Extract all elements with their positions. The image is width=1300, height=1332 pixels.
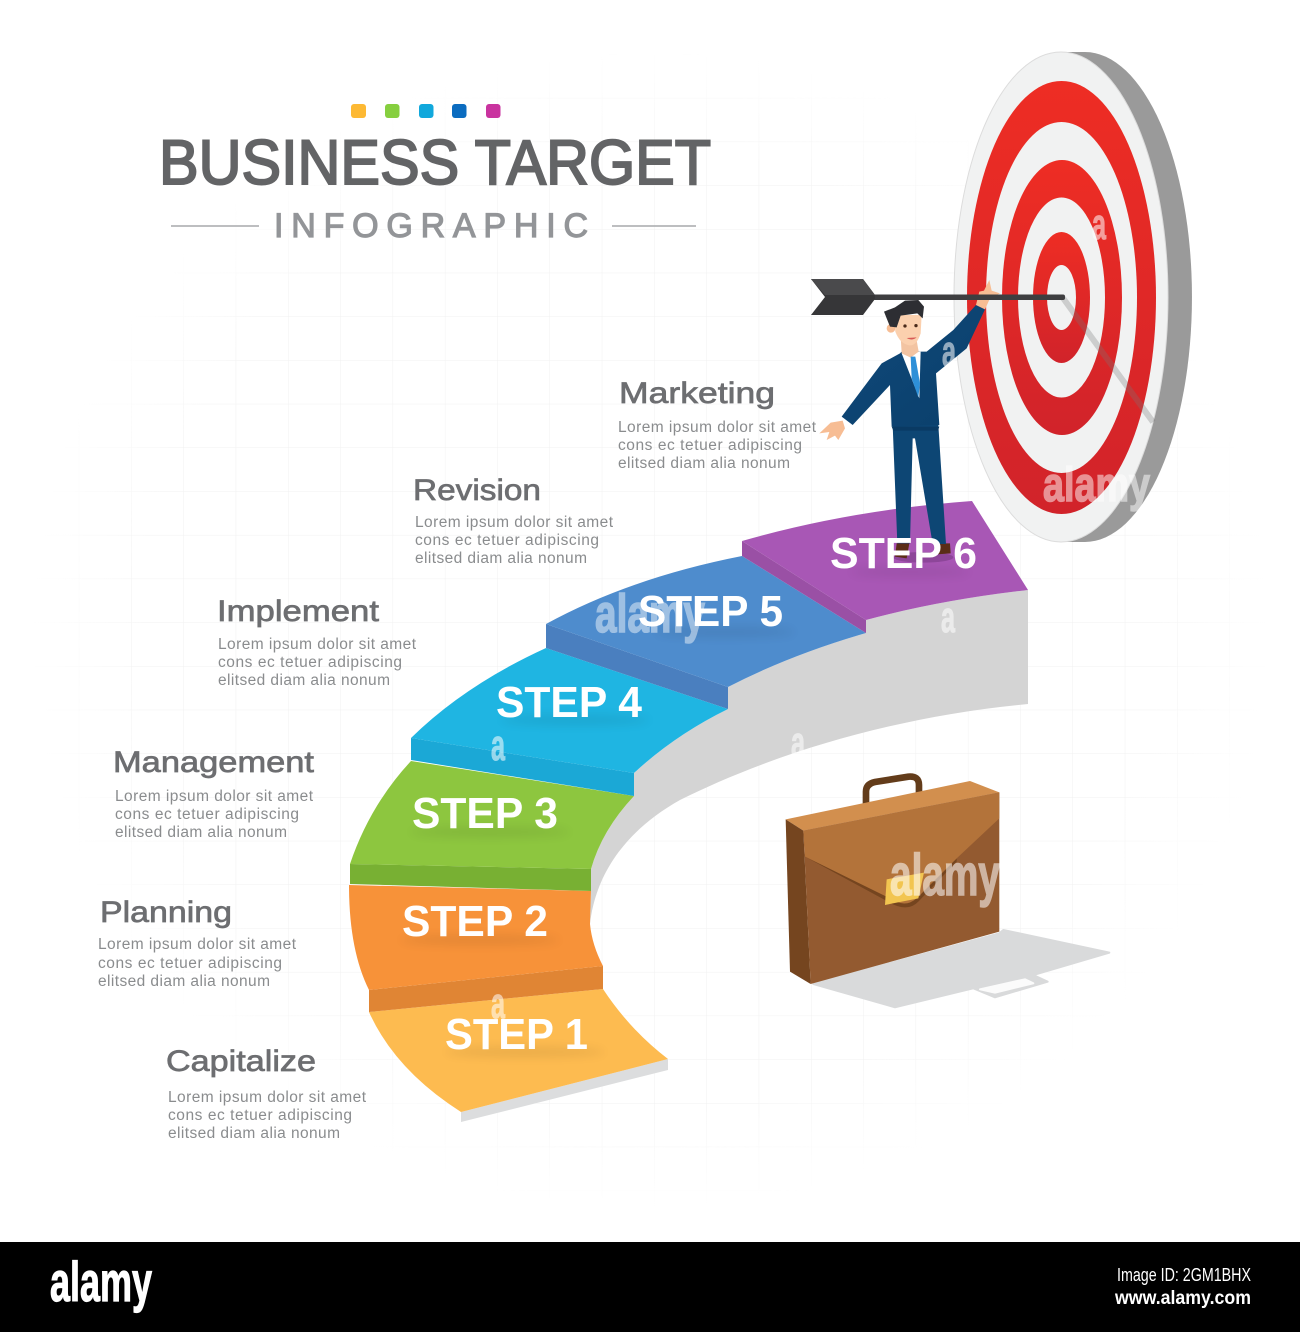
watermark marks: a	[491, 721, 505, 770]
label: implement: elitsed diam alia nonum	[218, 672, 390, 689]
website: www.alamy.com	[1114, 1288, 1251, 1309]
step labels: STEP 1	[445, 1010, 588, 1059]
label: planning: cons ec tetuer adipiscing	[98, 955, 282, 972]
label: marketing: cons ec tetuer adipiscing	[618, 437, 802, 454]
label: capitalize: elitsed diam alia nonum	[168, 1125, 340, 1142]
target board	[954, 52, 1192, 542]
watermark marks: alamy	[595, 584, 705, 644]
briefcase	[786, 777, 1109, 1007]
label: planning: Planning	[100, 896, 232, 929]
jacket	[842, 305, 985, 427]
raised hand	[976, 280, 1000, 309]
footer bar	[0, 1242, 1300, 1332]
step 2 block	[349, 885, 603, 1012]
step 6 block	[742, 501, 1028, 633]
shoes	[895, 543, 951, 558]
label: capitalize: Lorem ipsum dolor sit amet	[168, 1089, 367, 1106]
colour squares	[351, 104, 500, 118]
step labels	[402, 529, 977, 1059]
step 4 block	[411, 648, 728, 796]
arrow	[811, 279, 1065, 315]
label: marketing: Marketing	[619, 377, 775, 410]
step 1 block	[369, 989, 668, 1122]
label: management: Management	[113, 746, 315, 779]
businessman legs	[893, 425, 953, 563]
label: implement	[217, 595, 417, 689]
step labels: STEP 2	[402, 897, 548, 946]
label: management: elitsed diam alia nonum	[115, 824, 287, 841]
watermark marks: a	[791, 718, 805, 767]
watermark marks: a	[941, 593, 955, 642]
title block	[159, 104, 711, 245]
watermark marks: alamy	[1043, 459, 1150, 512]
watermark marks: a	[491, 979, 505, 1028]
watermark marks: a	[942, 327, 956, 376]
label: revision: Lorem ipsum dolor sit amet	[415, 514, 614, 531]
businessman upper body	[819, 280, 1000, 440]
label: capitalize	[166, 1045, 367, 1142]
label: implement: Implement	[217, 595, 380, 628]
image id: Image ID: 2GM1BHX	[1117, 1265, 1251, 1285]
label: capitalize: Capitalize	[166, 1045, 316, 1078]
label: management: Lorem ipsum dolor sit amet	[115, 788, 314, 805]
step labels: STEP 6	[830, 529, 977, 578]
subheading rules	[171, 225, 696, 227]
step 5 block	[546, 556, 866, 709]
label: capitalize: cons ec tetuer adipiscing	[168, 1107, 352, 1124]
label: revision: Revision	[413, 474, 541, 507]
watermark marks: a	[1092, 200, 1106, 249]
label: planning: elitsed diam alia nonum	[98, 973, 270, 990]
watermark marks: alamy	[890, 843, 1000, 908]
stair wall	[590, 590, 1028, 924]
label: revision	[413, 474, 614, 567]
arrow shadow on board	[1063, 298, 1153, 422]
label: marketing: elitsed diam alia nonum	[618, 455, 790, 472]
label: revision: cons ec tetuer adipiscing	[415, 532, 599, 549]
shirt and neck	[902, 352, 921, 398]
step labels: STEP 5	[638, 587, 783, 636]
label: planning	[98, 896, 297, 990]
heading: business target: BUSINESS TARGET	[159, 128, 711, 198]
label: marketing: Lorem ipsum dolor sit amet	[618, 419, 817, 436]
footer logo: alamy	[50, 1250, 152, 1313]
step 3 block	[350, 761, 634, 891]
step text shadows	[400, 568, 970, 1057]
label: marketing	[618, 377, 817, 472]
necktie	[911, 357, 920, 397]
label: management: cons ec tetuer adipiscing	[115, 806, 299, 823]
label: implement: Lorem ipsum dolor sit amet	[218, 636, 417, 653]
head	[884, 300, 924, 345]
label: revision: elitsed diam alia nonum	[415, 550, 587, 567]
trousers	[893, 425, 946, 544]
step labels: STEP 3	[412, 789, 558, 838]
label: implement: cons ec tetuer adipiscing	[218, 654, 402, 671]
left hand	[819, 421, 845, 440]
subheading: infographic: INFOGRAPHIC	[274, 207, 588, 245]
step labels: STEP 4	[496, 678, 643, 727]
briefcase shadow	[813, 930, 1109, 1007]
label: management	[113, 746, 315, 841]
briefcase handle	[866, 777, 919, 808]
watermark marks	[491, 200, 1150, 1028]
label: planning: Lorem ipsum dolor sit amet	[98, 936, 297, 953]
briefcase buckle	[885, 873, 924, 905]
